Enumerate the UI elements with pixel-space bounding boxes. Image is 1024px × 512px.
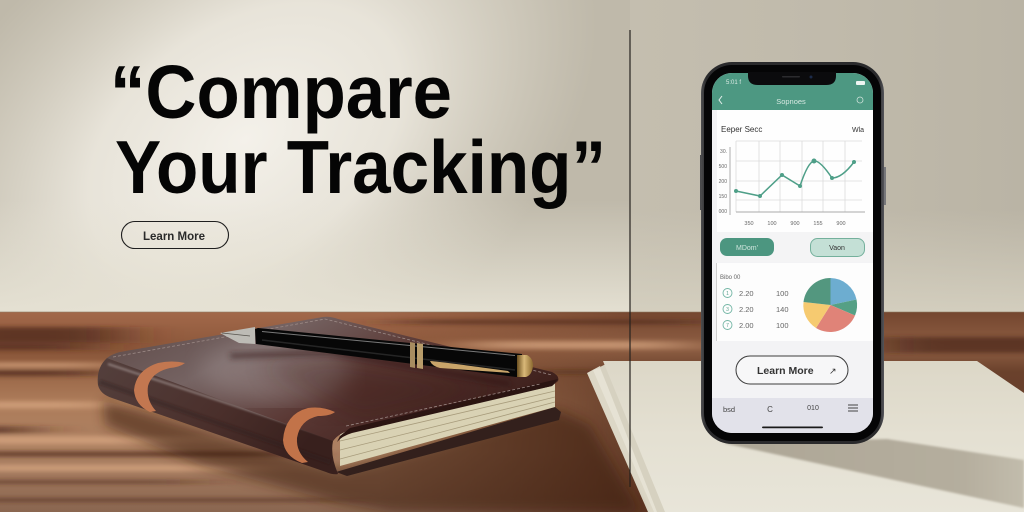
line chart <box>719 141 865 227</box>
stats card <box>716 263 873 341</box>
notebook cover edge <box>337 379 558 442</box>
button: learn more <box>122 222 228 248</box>
phone learn more button: ↗ <box>829 366 837 376</box>
line chart: 350 <box>744 221 754 227</box>
pen shadow <box>230 352 510 384</box>
stats card: 2.00 <box>739 321 754 330</box>
notebook spine highlights <box>108 364 333 438</box>
divider line <box>629 30 631 487</box>
phone body <box>701 62 884 444</box>
phone side buttons <box>700 155 702 210</box>
pen cap end <box>517 355 533 377</box>
stats card: 100 <box>776 321 789 330</box>
line chart: 200 <box>719 179 727 185</box>
title: Your Tracking” <box>115 125 606 209</box>
notebook spine <box>98 358 340 474</box>
fountain pen <box>220 327 533 384</box>
phone notch <box>748 72 836 85</box>
paper stack <box>587 361 1024 512</box>
phone screen <box>712 73 873 433</box>
title: “Compare <box>110 50 452 134</box>
phone learn more button <box>736 356 848 384</box>
home indicator <box>762 426 823 428</box>
stats card: 1 <box>726 291 729 297</box>
toggle buttons: MDom' <box>736 245 758 252</box>
notebook back cover <box>336 407 561 476</box>
line chart: 100 <box>767 221 777 227</box>
notebook cover sheen <box>201 340 407 408</box>
app header: 5:01 f <box>726 80 741 86</box>
stats card: Bibo 00 <box>720 275 741 281</box>
line chart: 500 <box>719 164 727 170</box>
title <box>110 50 606 209</box>
background: wall <box>0 0 1024 314</box>
notebook shadow <box>103 400 640 512</box>
phone learn more button: Learn More <box>757 365 814 377</box>
pie chart <box>803 278 857 332</box>
phone shadow on paper <box>723 439 1024 508</box>
background: wooden table <box>0 311 1024 512</box>
notebook strap left <box>134 362 185 412</box>
pen nib <box>220 327 255 344</box>
chart card <box>717 110 873 232</box>
tab bar: 010 <box>807 405 819 412</box>
toggle buttons <box>720 238 865 257</box>
chart card: Wlа <box>852 127 864 134</box>
pen rings <box>410 342 415 368</box>
button: learn more: Learn More <box>143 231 205 243</box>
notebook cover <box>107 317 558 441</box>
notebook strap right <box>283 408 335 463</box>
notebook stitching <box>113 319 552 426</box>
line chart: 155 <box>813 221 823 227</box>
line chart: 900 <box>790 221 800 227</box>
tab bar <box>712 398 873 433</box>
toggle buttons: Vaon <box>829 245 845 252</box>
pen clip <box>430 361 510 373</box>
line chart: 150 <box>719 194 727 200</box>
notebook <box>98 317 640 512</box>
stats card: 7 <box>726 323 729 329</box>
stats card: 140 <box>776 305 789 314</box>
tab bar: bsd <box>723 405 735 414</box>
stats card: 100 <box>776 289 789 298</box>
line chart: 900 <box>836 221 846 227</box>
stats card: 2.20 <box>739 305 754 314</box>
line chart: 000 <box>719 209 727 215</box>
stats card: 2.20 <box>739 289 754 298</box>
tab bar: C <box>767 405 773 414</box>
notebook pages <box>340 383 555 466</box>
line chart: 30. <box>720 149 727 155</box>
pen barrel <box>255 328 522 377</box>
stats card: 3 <box>726 307 729 313</box>
phone <box>700 62 886 444</box>
app header <box>712 73 873 110</box>
app header: Sopnoes <box>776 97 806 106</box>
chart card: Eeper Secc <box>721 125 762 134</box>
